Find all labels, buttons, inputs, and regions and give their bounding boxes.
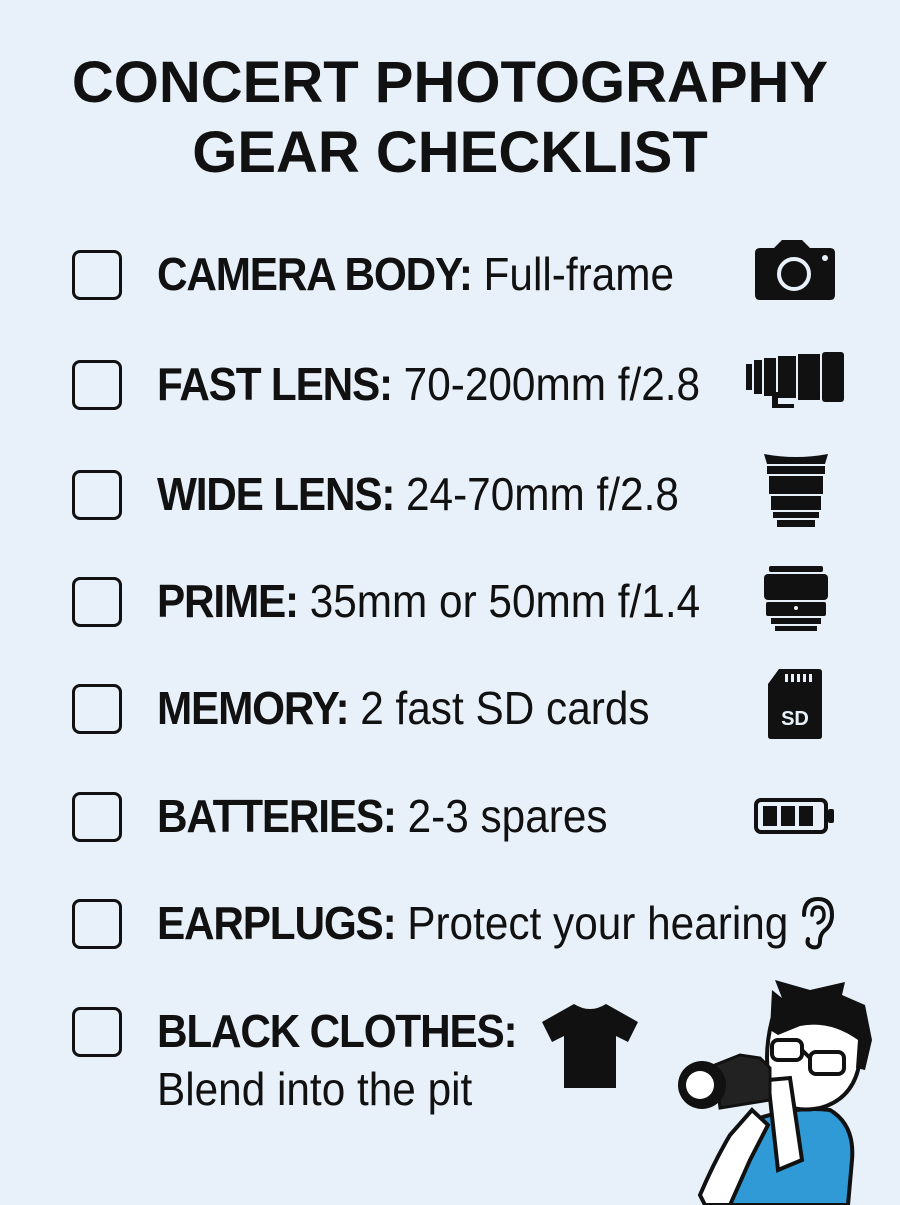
face (767, 1014, 865, 1110)
icon: t-shirt (542, 1004, 638, 1088)
row: camera body: CAMERA BODY: Full-frame (157, 248, 674, 300)
icon: wide lens (764, 454, 828, 527)
row: batteries: BATTERIES: 2-3 spares (157, 790, 608, 842)
row: black clothes: BLACK CLOTHES: (157, 1005, 516, 1057)
icon: telephoto lens (746, 352, 844, 408)
icon: camera (755, 240, 835, 300)
icon: SD card (768, 669, 822, 739)
shirt (720, 1109, 852, 1205)
glasses (772, 1040, 802, 1060)
row: wide lens: WIDE LENS: 24-70mm f/2.8 (157, 468, 679, 520)
icon: ear (802, 897, 834, 950)
camera (715, 1055, 770, 1108)
title: CONCERT PHOTOGRAPHY (72, 50, 828, 115)
illustration: photographer (678, 980, 872, 1205)
row: black clothes (72, 1005, 516, 1115)
row: black clothes: Blend into the pit (157, 1063, 472, 1115)
title (72, 50, 828, 185)
row: earplugs: EARPLUGS: Protect your hearing (157, 897, 788, 949)
row: fast lens: FAST LENS: 70-200mm f/2.8 (157, 358, 700, 410)
row: prime: PRIME: 35mm or 50mm f/1.4 (157, 575, 700, 627)
title: GEAR CHECKLIST (192, 120, 708, 185)
row: memory: MEMORY: 2 fast SD cards (157, 682, 650, 734)
icon: prime lens (764, 566, 828, 631)
arms (700, 1110, 768, 1205)
icon: battery (754, 798, 834, 834)
hair (770, 980, 872, 1070)
icon: SD card: SD (781, 708, 809, 730)
